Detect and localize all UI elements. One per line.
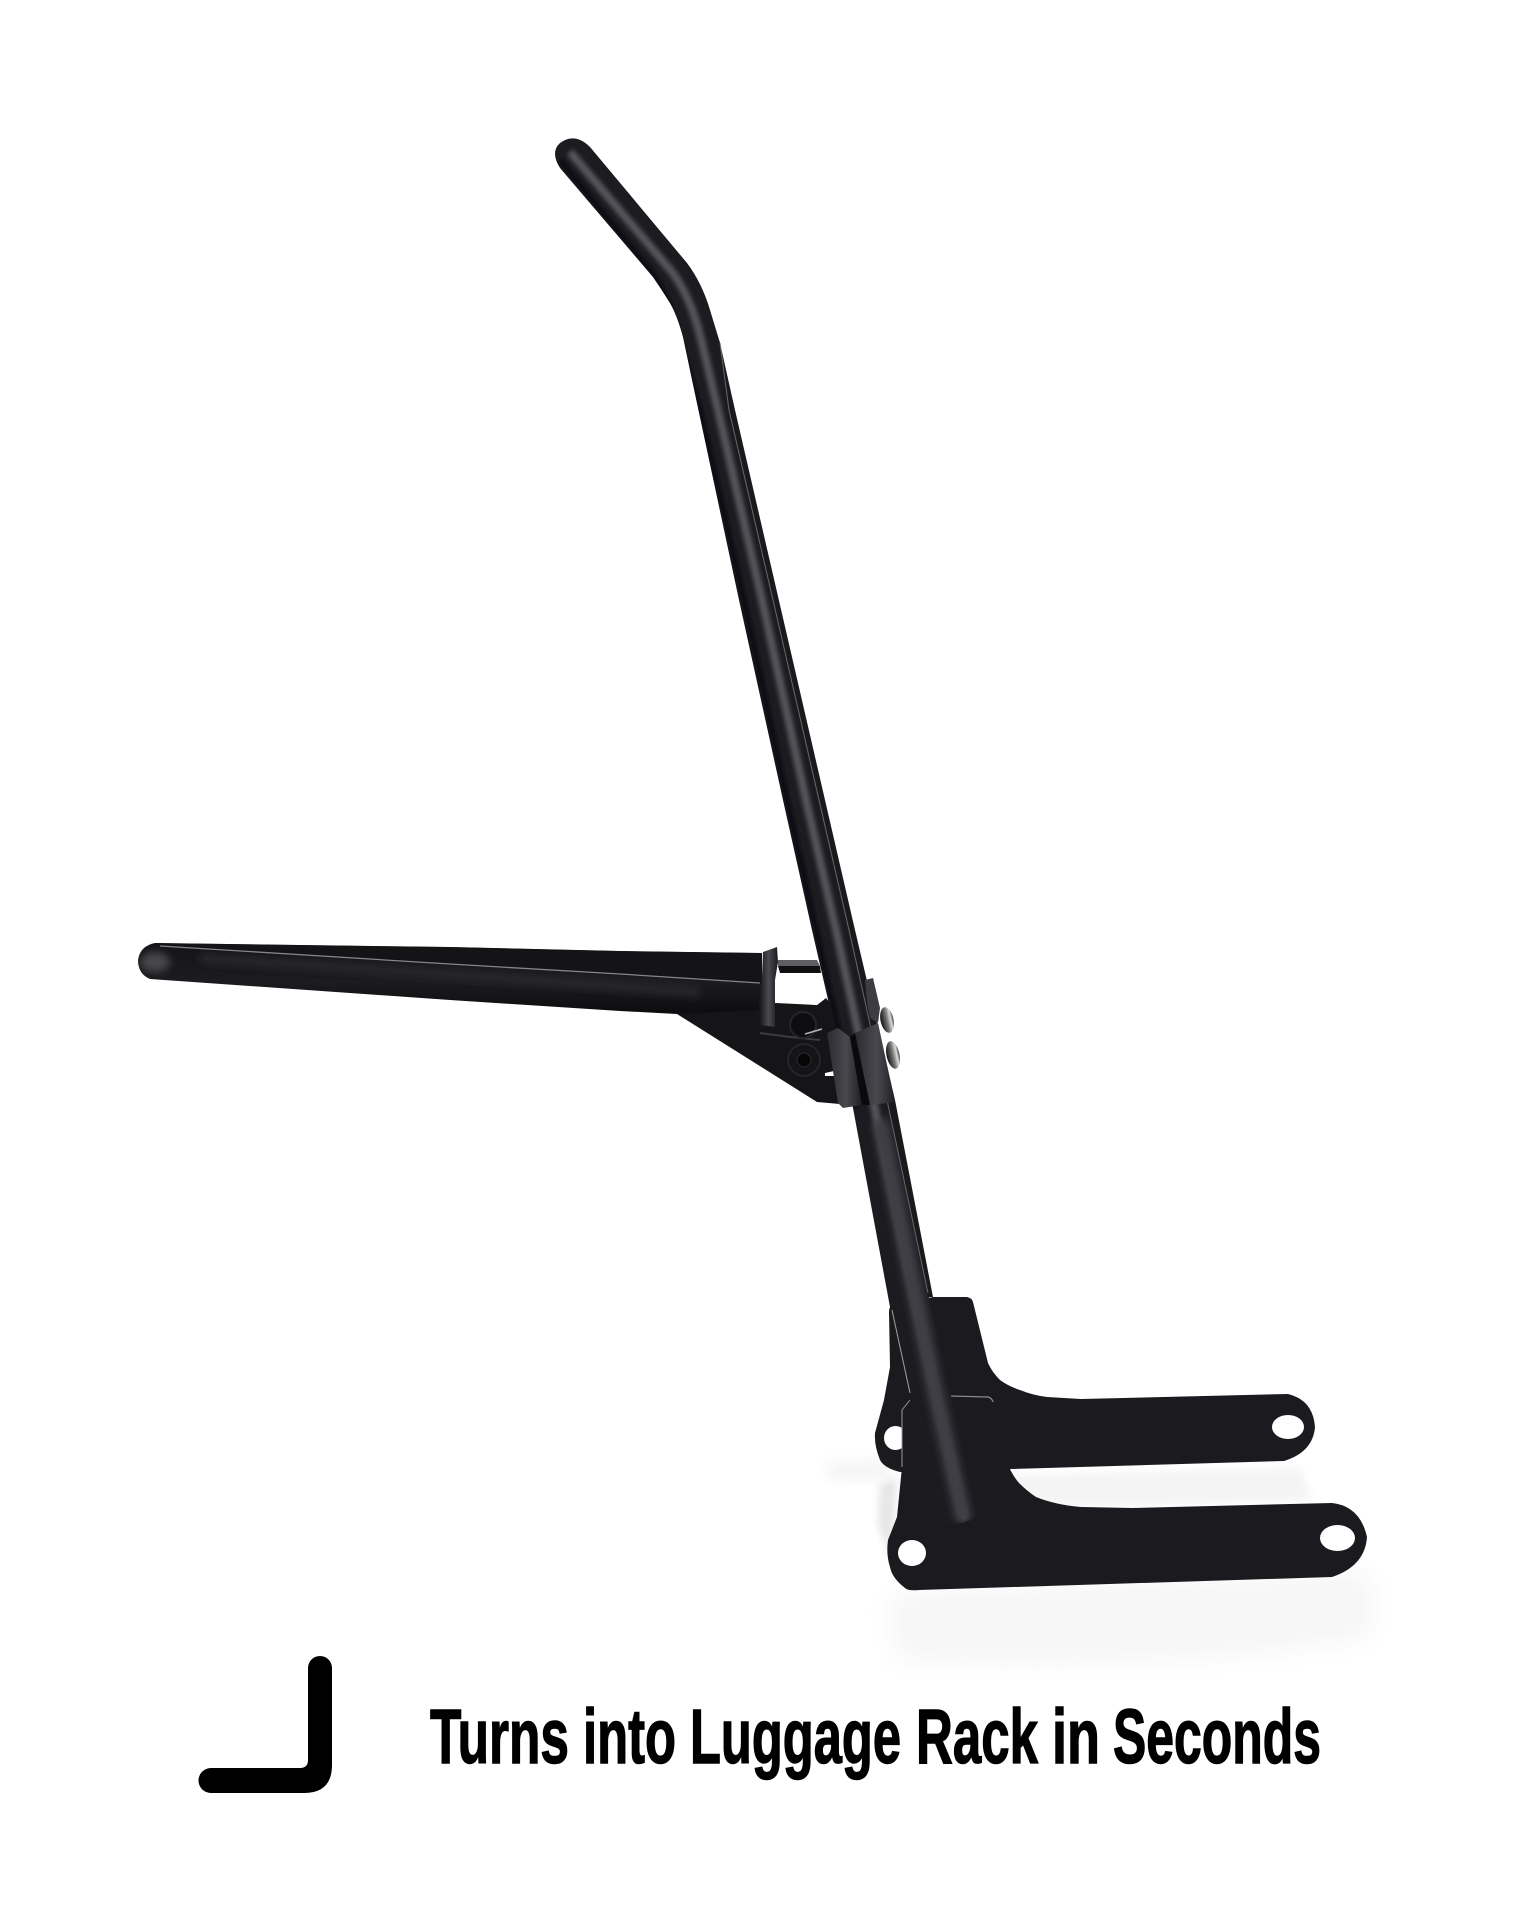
caption: Rack — [916, 1694, 1038, 1780]
rear mounting plate — [875, 1297, 1315, 1472]
window through the bracket — [776, 973, 826, 1005]
rear upright tube — [712, 318, 933, 1297]
caption: Turns — [430, 1694, 569, 1780]
caption: Seconds — [1113, 1694, 1321, 1780]
bolts — [865, 978, 902, 1070]
sissy bar rack: gusset and folding rail — [138, 943, 860, 1104]
caption: into — [583, 1694, 676, 1780]
lower pivot — [788, 1044, 820, 1076]
gusset bracket — [677, 998, 860, 1104]
bracket edge — [760, 1033, 820, 1040]
caption: in — [1052, 1694, 1100, 1780]
main upright tube — [555, 138, 977, 1525]
floor reflection — [826, 1460, 1372, 1663]
icon: L-shaped tube symbol — [198, 1656, 332, 1793]
caption: Luggage — [690, 1694, 901, 1780]
upper pivot — [790, 1012, 822, 1038]
folded rail tubes — [138, 943, 762, 1014]
tube clamp — [827, 1023, 895, 1108]
hinge end plate — [759, 947, 778, 1027]
front mounting plate — [887, 1396, 1367, 1590]
product infographic — [138, 138, 1367, 1793]
cross bar — [778, 960, 820, 966]
